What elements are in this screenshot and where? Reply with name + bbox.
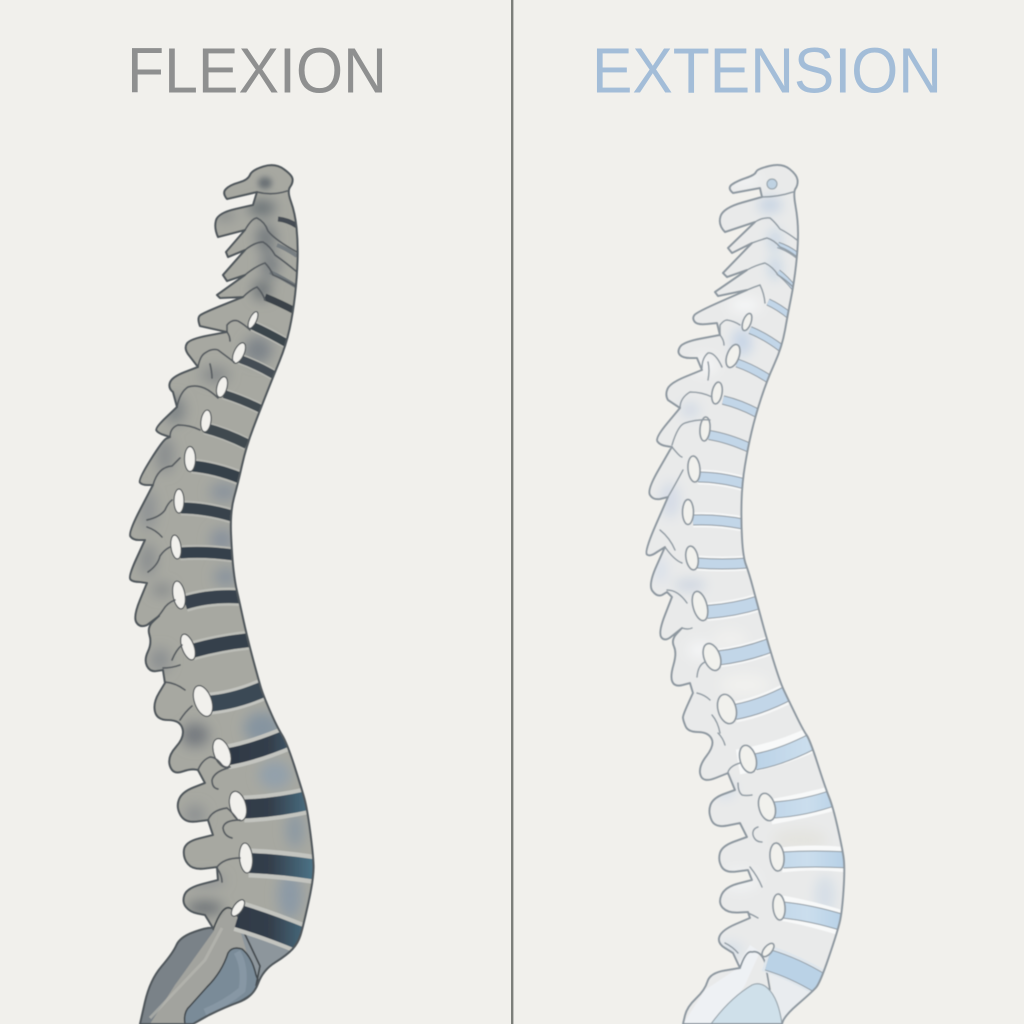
center divider [511, 0, 513, 1024]
atlas opening: extension [767, 179, 777, 189]
discs: extension [693, 245, 848, 984]
outline: extension [646, 165, 844, 1024]
joint contour lines: flexion [147, 191, 297, 882]
discs: flexion [180, 219, 318, 939]
shading: extension bone tones [652, 174, 835, 958]
spine: extension (pale blue) [646, 165, 848, 1024]
title: flexion: FLEXION [127, 34, 387, 106]
sacrum: flexion [140, 908, 300, 1024]
sacrum: extension [685, 946, 782, 1024]
foramina: flexion [169, 310, 260, 918]
spine: flexion (grey) [130, 165, 318, 1024]
shading: flexion bone tones [140, 200, 304, 919]
outline: flexion [130, 165, 314, 1024]
joint contour lines: extension [660, 192, 797, 953]
atlas opening: flexion [258, 177, 272, 189]
foramina: extension [682, 312, 786, 959]
title: extension: EXTENSION [592, 34, 942, 106]
